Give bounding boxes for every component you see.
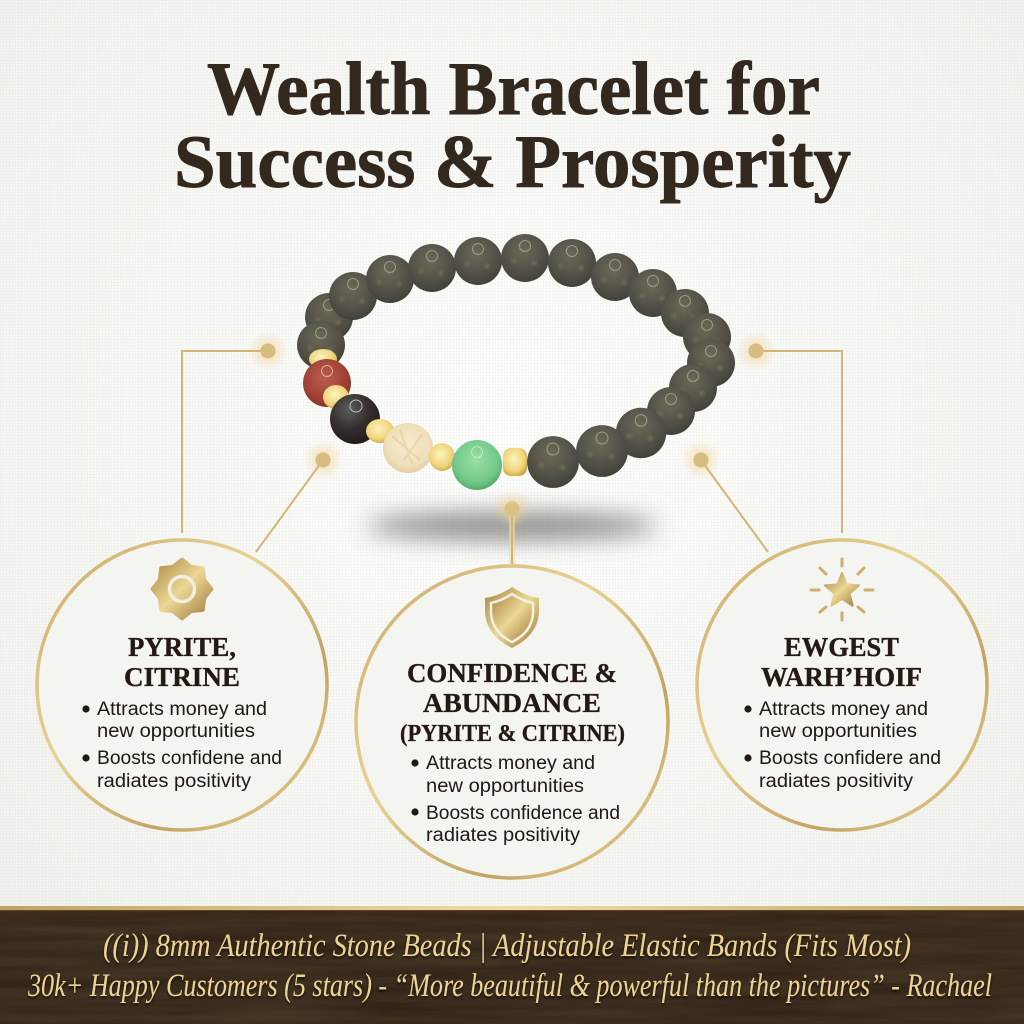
bullet list: radiates positivity	[759, 771, 914, 792]
gold spacer over red bead	[323, 385, 349, 409]
bullet list: new opportunities	[426, 776, 584, 797]
bullet list	[411, 753, 620, 846]
heading: confidence and abundance: ABUNDANCE	[423, 688, 601, 718]
citrine bead	[383, 423, 433, 473]
heading: confidence and abundance: CONFIDENCE &	[407, 658, 617, 688]
gold spacer beside green	[503, 448, 527, 476]
bullet list: Attracts money and	[759, 699, 928, 720]
heading: ewgest warh'hoif: EWGEST	[784, 632, 899, 662]
heading: pyrite, citrine	[124, 632, 240, 692]
panel: pyrite, citrine	[37, 540, 327, 830]
bullet list: radiates positivity	[97, 771, 252, 792]
icon: radiant star	[811, 559, 873, 620]
bracelet shadow	[367, 513, 657, 539]
connector: left diagonal	[256, 440, 343, 552]
bullet list	[82, 699, 282, 792]
bullet list	[744, 699, 941, 792]
footer text: ((i)) 8mm Authentic Stone Beads | Adjustable Elastic Bands (Fits Most)	[103, 928, 911, 964]
bullet list: Attracts money and	[97, 699, 267, 720]
pyrite beads: back row	[297, 234, 735, 387]
bracelet	[297, 234, 735, 490]
connector: left elbow	[182, 331, 288, 533]
title	[174, 48, 851, 204]
bullet list: Boosts confidene and	[97, 748, 282, 769]
heading: ewgest warh'hoif: WARH’HOIF	[761, 662, 922, 692]
pyrite beads: front right	[527, 364, 717, 488]
heading: ewgest warh'hoif	[761, 632, 922, 692]
icon: shield	[485, 587, 539, 648]
panel: confidence and abundance	[356, 566, 668, 878]
bullet list: Boosts confidence and	[426, 803, 620, 824]
connector: centre	[492, 489, 532, 564]
heading: pyrite, citrine: CITRINE	[124, 662, 240, 692]
gold spacer beads: upper left	[309, 349, 337, 369]
green aventurine bead	[452, 440, 502, 490]
footer band	[0, 906, 1024, 1024]
heading: confidence and abundance: (PYRITE & CITRINE)	[400, 721, 625, 747]
icon: gold seal	[152, 559, 212, 619]
heading: pyrite, citrine: PYRITE,	[128, 632, 236, 662]
bullet list: Boosts confidere and	[759, 748, 941, 769]
connector: right elbow	[736, 331, 842, 533]
bullet list: radiates positivity	[426, 825, 581, 846]
footer text	[27, 928, 992, 1004]
bullet list: Attracts money and	[426, 753, 595, 774]
connector: right diagonal	[681, 440, 768, 552]
black onyx bead	[330, 394, 380, 444]
bullet list: new opportunities	[97, 721, 255, 742]
title: Success & Prosperity	[174, 121, 851, 204]
panel: ewgest warh'hoif	[697, 540, 987, 830]
red carnelian bead	[303, 359, 351, 407]
bullet list: new opportunities	[759, 721, 917, 742]
gold spacer beside citrine	[429, 443, 455, 471]
heading: confidence and abundance	[400, 658, 625, 747]
title: Wealth Bracelet for	[207, 48, 820, 131]
gold spacer beside onyx	[366, 419, 394, 443]
